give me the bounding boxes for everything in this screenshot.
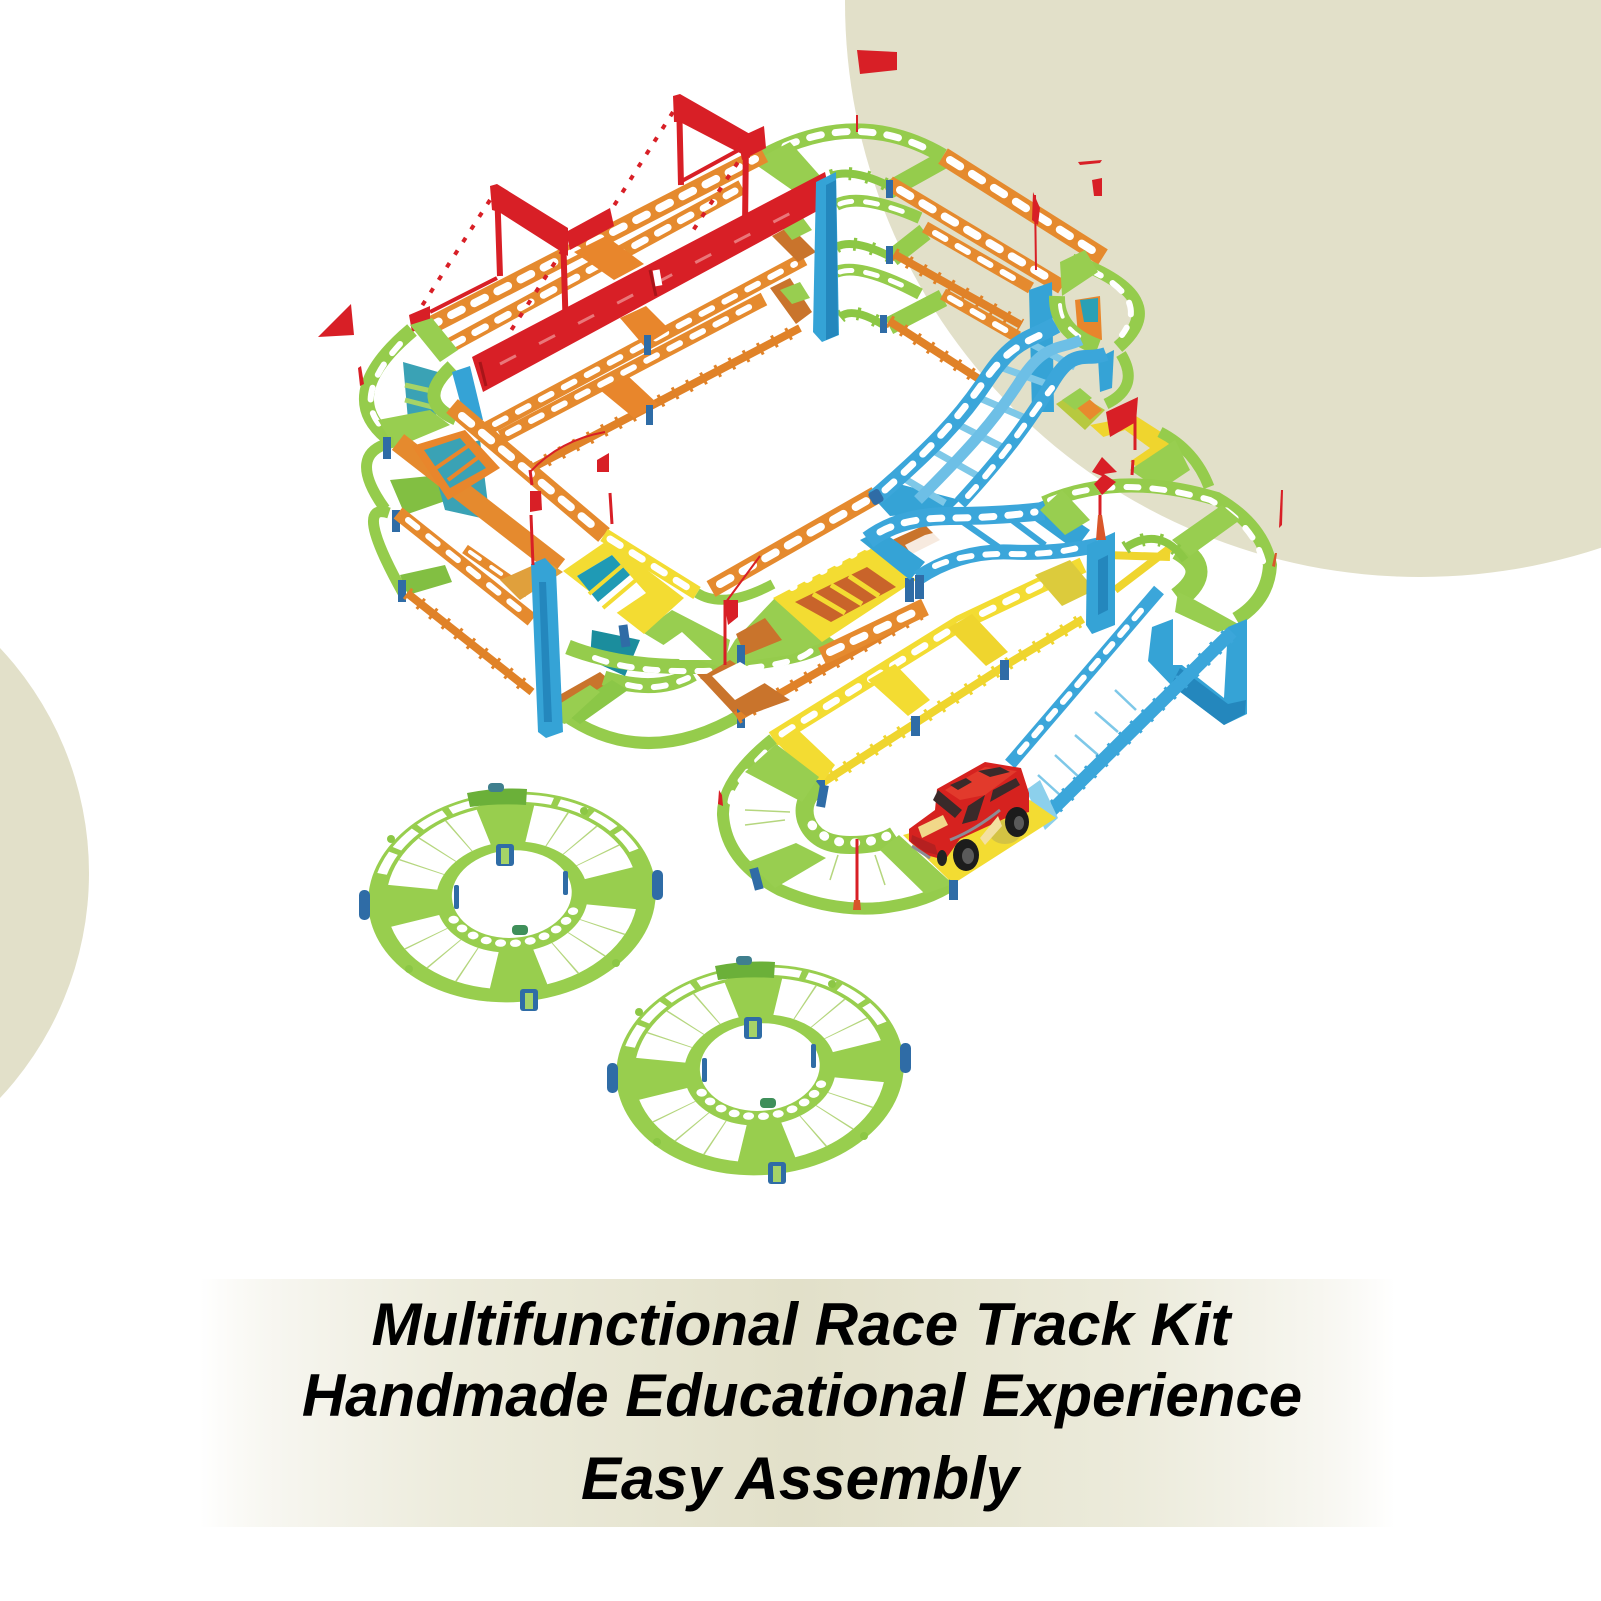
loose green ring piece, right xyxy=(607,955,911,1185)
flag on left corner xyxy=(318,304,354,337)
lower green U-turn xyxy=(718,739,1056,910)
lower blue ramp and support frame xyxy=(1010,590,1247,830)
red suspension bridge xyxy=(409,94,832,392)
blue upper ramp xyxy=(867,325,1106,516)
race track assembled set xyxy=(318,50,1283,910)
right-hand flags and diamond marker xyxy=(1092,397,1283,567)
left curved green tiers xyxy=(366,318,483,602)
back-right orange tiers xyxy=(889,156,1103,379)
caption line 3: Easy Assembly xyxy=(581,1445,1022,1512)
right upper flags xyxy=(857,115,1102,270)
small red pennants and poles, main loop xyxy=(358,366,760,665)
upper yellow and green back curve xyxy=(1090,416,1209,490)
red flag poles on U-turn xyxy=(718,790,861,910)
right corner green ring xyxy=(1029,250,1138,430)
bridge towers and cables xyxy=(409,94,766,335)
top corner green arcs xyxy=(752,131,943,333)
blue crossing track xyxy=(860,500,1098,599)
back blue column xyxy=(813,172,839,342)
right green loop xyxy=(1040,485,1270,632)
car body xyxy=(909,762,1029,860)
caption band with fading gradient xyxy=(200,1279,1395,1527)
background: top-right beige circle xyxy=(845,0,1601,577)
front-left orange tiers xyxy=(398,406,604,692)
car roof and windows xyxy=(933,767,1020,824)
loose green ring piece, left xyxy=(359,782,663,1012)
car wheels xyxy=(937,807,1029,871)
caption text xyxy=(302,1291,1302,1512)
front corner yellow and green sections xyxy=(540,535,836,743)
front-right orange and yellow sections xyxy=(700,495,925,718)
caption line 1: Multifunctional Race Track Kit xyxy=(371,1291,1234,1358)
front-left blue column xyxy=(531,558,563,738)
top flag xyxy=(857,50,897,74)
red bridge deck xyxy=(472,172,832,392)
toy race car xyxy=(909,762,1029,871)
caption line 2: Handmade Educational Experience xyxy=(302,1362,1302,1429)
blue front column xyxy=(1086,532,1115,634)
background: left beige circle xyxy=(0,544,89,1202)
back-left middle and low orange tiers xyxy=(488,214,816,468)
car decals and grille xyxy=(911,810,1002,858)
lower yellow straight track xyxy=(773,548,1170,800)
